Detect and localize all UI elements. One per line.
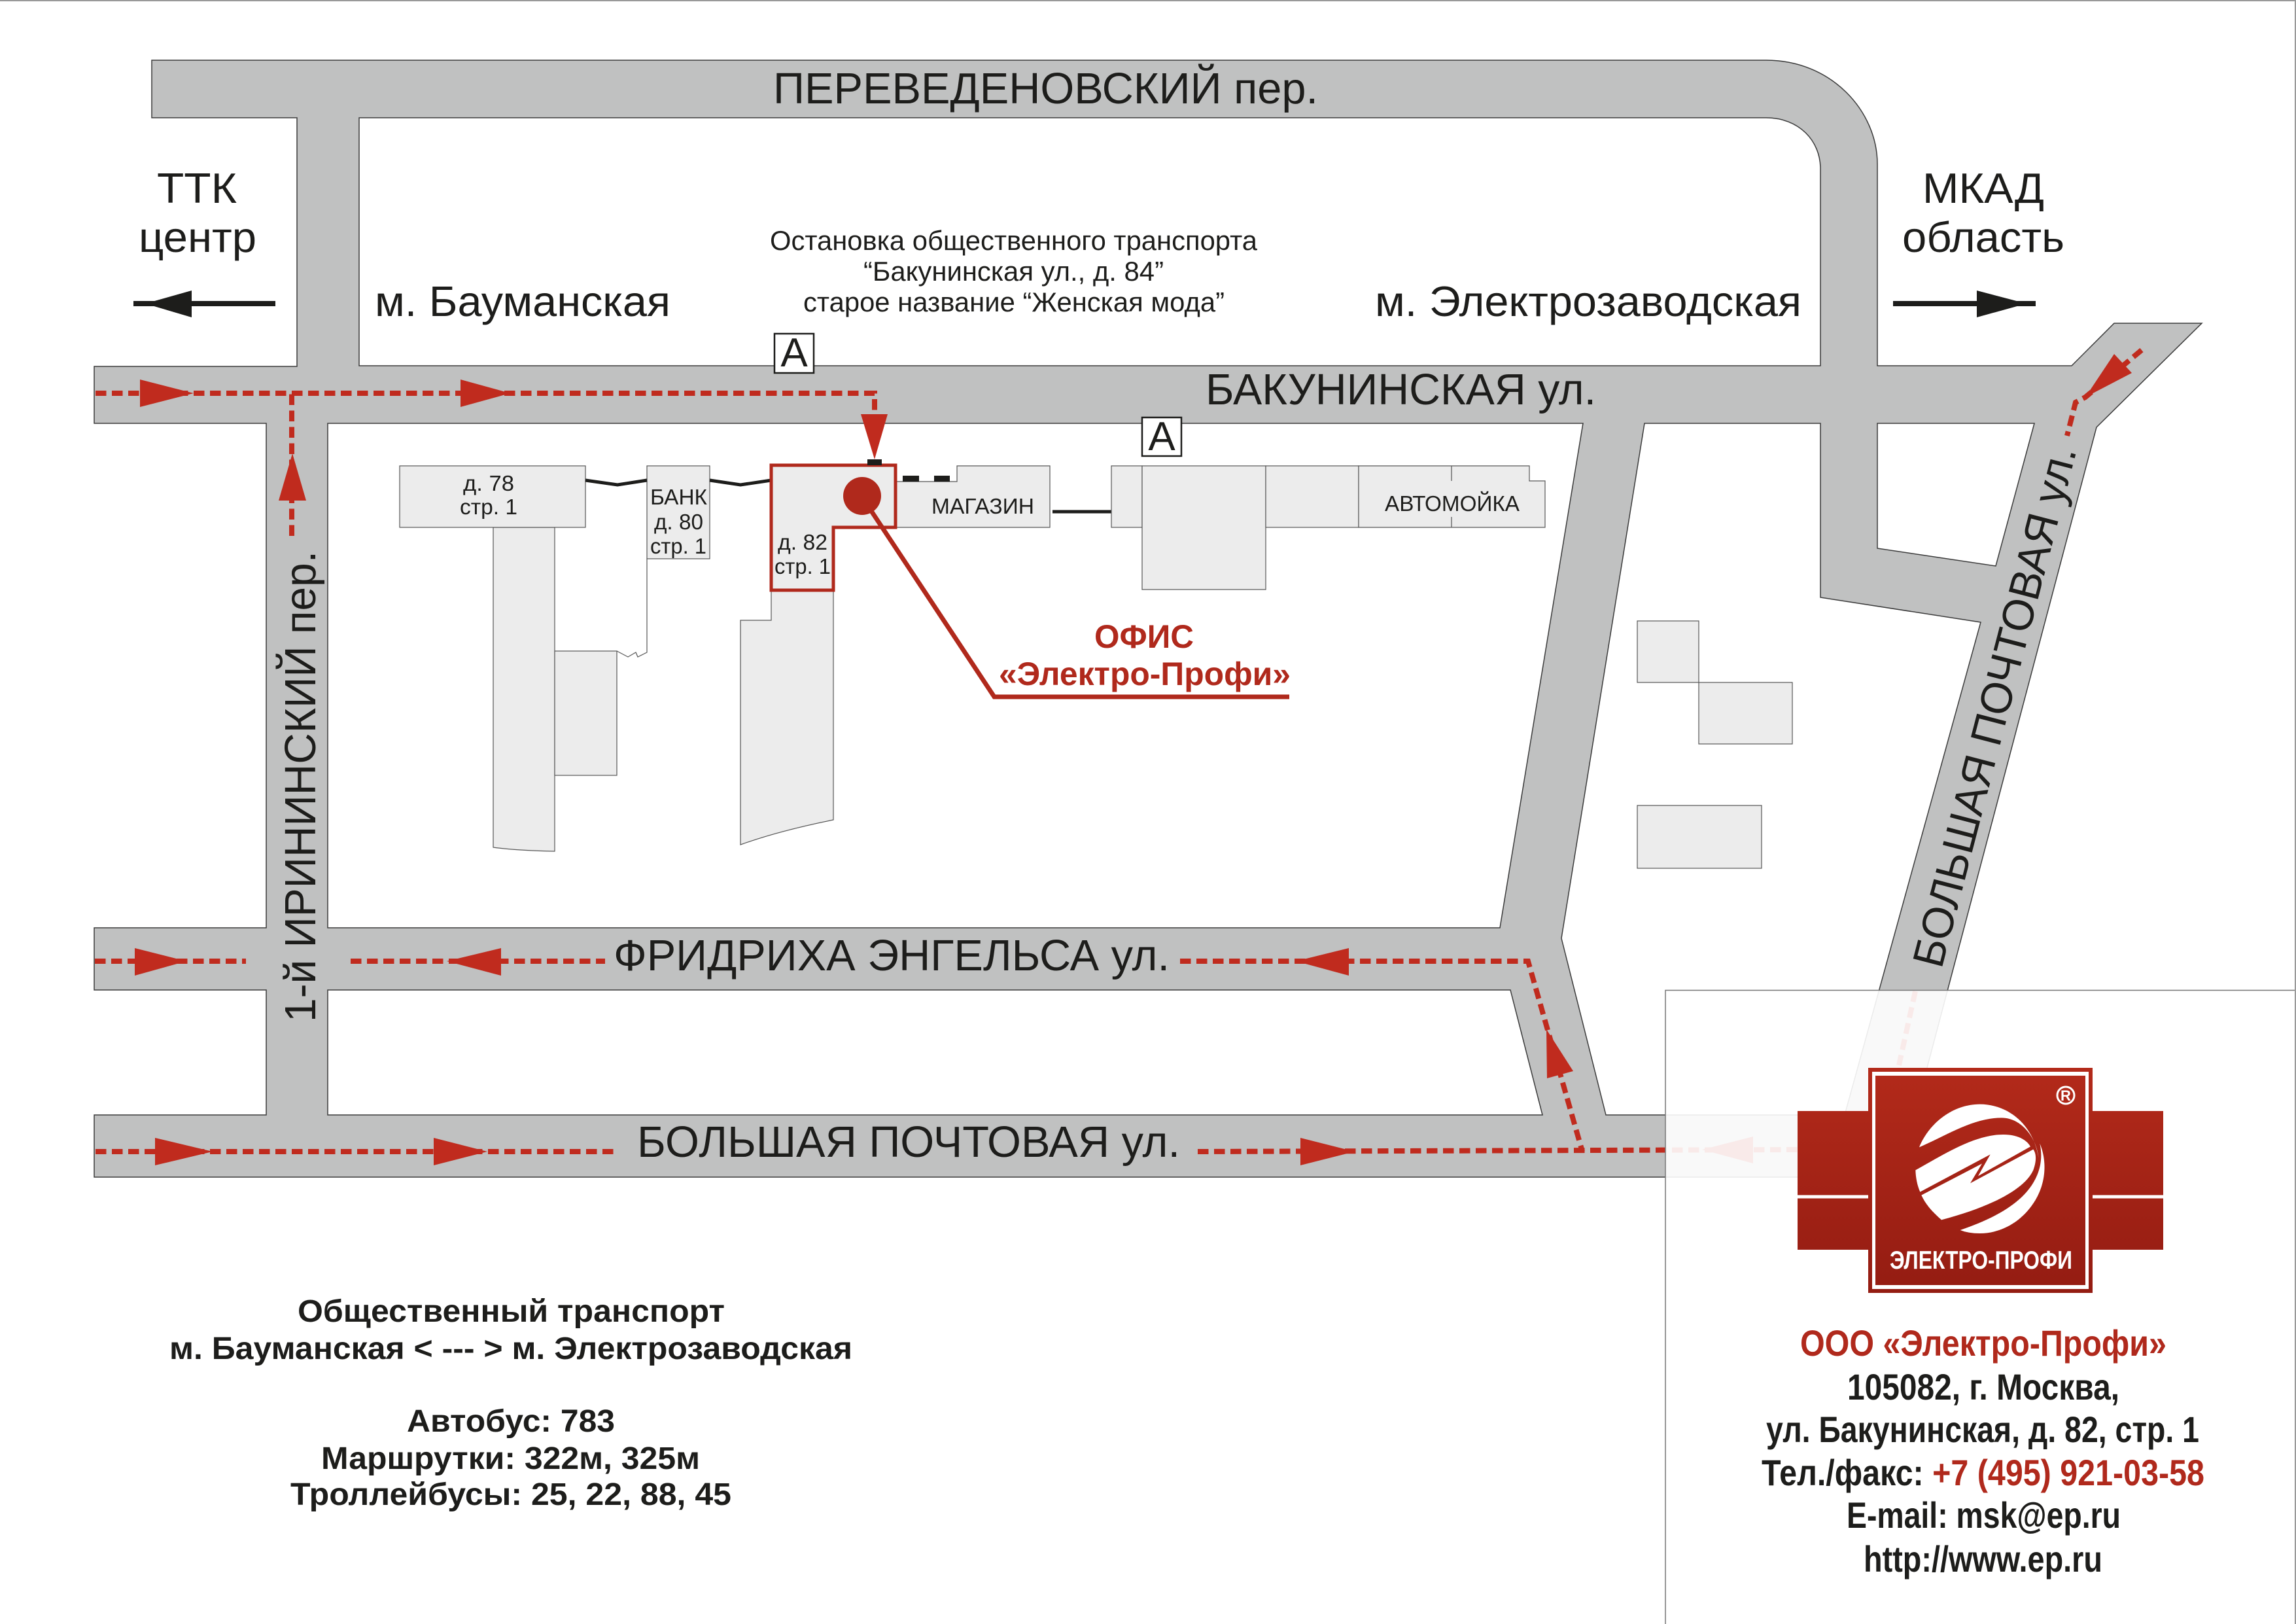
panel: company card	[1665, 991, 2296, 1624]
direction: MKAD region: область	[1902, 213, 2064, 261]
route: Irininsky lane	[279, 393, 306, 536]
building: office house 82: стр. 1	[774, 554, 831, 578]
direction: MKAD region: МКАД	[1922, 164, 2044, 212]
logo wordmark: ЭЛЕКТРО-ПРОФИ	[1890, 1246, 2072, 1275]
public transport info: Автобус: 783	[407, 1404, 615, 1439]
public transport info: Общественный транспорт	[298, 1294, 725, 1329]
route: Bakuninskaya street	[96, 380, 888, 459]
office callout: ОФИС	[1094, 618, 1194, 655]
direction: MKAD region	[1893, 164, 2064, 317]
stop marker A (south side)	[1142, 414, 1181, 459]
label: Elektrozavodskaya metro: м. Электрозаводская	[1375, 277, 1801, 325]
label: Bolshaya Pochtovaya diagonal: БОЛЬШАЯ ПОЧТОВАЯ ул.	[1904, 440, 2086, 972]
public transport info: Маршрутки: 322м, 325м	[321, 1441, 700, 1476]
building: shop	[896, 466, 1050, 527]
fences between buildings	[585, 480, 1111, 512]
building: house 78	[400, 466, 617, 851]
label: Bakuninskaya street: БАКУНИНСКАЯ ул.	[1206, 365, 1596, 414]
company contacts: Тел./факс: +7 (495) 921-03-58	[1762, 1452, 2204, 1493]
building: house 78: д. 78	[463, 471, 514, 495]
logo globe with lightning	[1915, 1104, 2045, 1233]
entrance marks	[867, 459, 950, 482]
stop marker A (south side): А	[1148, 414, 1175, 459]
public transport info: м. Бауманская < --- > м. Электрозаводская	[169, 1332, 852, 1366]
stop marker A (north side)	[774, 330, 814, 376]
label: 1st Irininsky lane: 1-й ИРИНИНСКИЙ пер.	[275, 551, 325, 1022]
route: Engels street	[95, 948, 1582, 1152]
buildings: east block	[1637, 621, 1792, 868]
road network	[94, 60, 2202, 1177]
company logo	[1798, 1068, 2163, 1293]
company contacts: ул. Бакунинская, д. 82, стр. 1	[1766, 1409, 2199, 1450]
label: Perevedenovsky lane: ПЕРЕВЕДЕНОВСКИЙ пер.	[773, 63, 1318, 113]
text: public transport stop	[770, 225, 1258, 317]
office callout	[843, 477, 1291, 697]
building: bank house 80: стр. 1	[650, 534, 706, 558]
company contacts: http://www.ep.ru	[1864, 1538, 2102, 1580]
company contacts: ООО «Электро-Профи»	[1800, 1322, 2166, 1364]
building: car wash block: АВТОМОЙКА	[1385, 491, 1520, 516]
building: lower part of house 82	[740, 590, 833, 845]
office callout: «Электро-Профи»	[999, 656, 1291, 692]
building: bank house 80: д. 80	[654, 510, 703, 534]
company contacts: 105082, г. Москва,	[1847, 1366, 2119, 1407]
public transport info	[169, 1294, 852, 1512]
logo side bands	[1798, 1111, 2163, 1250]
building: office house 82: д. 82	[778, 530, 827, 554]
text: public transport stop: “Бакунинская ул., д. 84”	[863, 256, 1164, 287]
logo registered mark	[2057, 1087, 2074, 1104]
label: Baumanskaya metro: м. Бауманская	[375, 277, 670, 325]
text: public transport stop: старое название “Женская мода”	[803, 287, 1225, 317]
direction: TTK centre: центр	[139, 213, 256, 261]
building: office house 82	[771, 465, 896, 590]
stop marker A (north side): А	[780, 330, 808, 376]
public transport info: Троллейбусы: 25, 22, 88, 45	[290, 1477, 731, 1512]
logo registered mark: R	[2061, 1087, 2071, 1104]
logo frame	[1868, 1068, 2093, 1293]
building: shop: МАГАЗИН	[931, 494, 1034, 518]
building: car wash block	[1111, 466, 1545, 590]
label: Bolshaya Pochtovaya street: БОЛЬШАЯ ПОЧТОВАЯ ул.	[637, 1118, 1180, 1167]
direction: TTK centre: ТТК	[157, 164, 237, 212]
building: bank house 80: БАНК	[650, 485, 708, 509]
route: north-east corner	[1899, 350, 2142, 1065]
route: Bolshaya Pochtovaya street	[96, 1137, 1799, 1165]
text: public transport stop: Остановка общественного транспорта	[770, 225, 1258, 256]
company contacts	[1762, 1322, 2204, 1580]
building: bank house 80	[617, 466, 710, 657]
building: house 78: стр. 1	[460, 495, 517, 519]
direction: TTK centre	[133, 164, 275, 317]
company contacts: E-mail: msk@ep.ru	[1847, 1494, 2121, 1536]
label: Friedrich Engels street: ФРИДРИХА ЭНГЕЛЬСА ул.	[614, 931, 1170, 980]
